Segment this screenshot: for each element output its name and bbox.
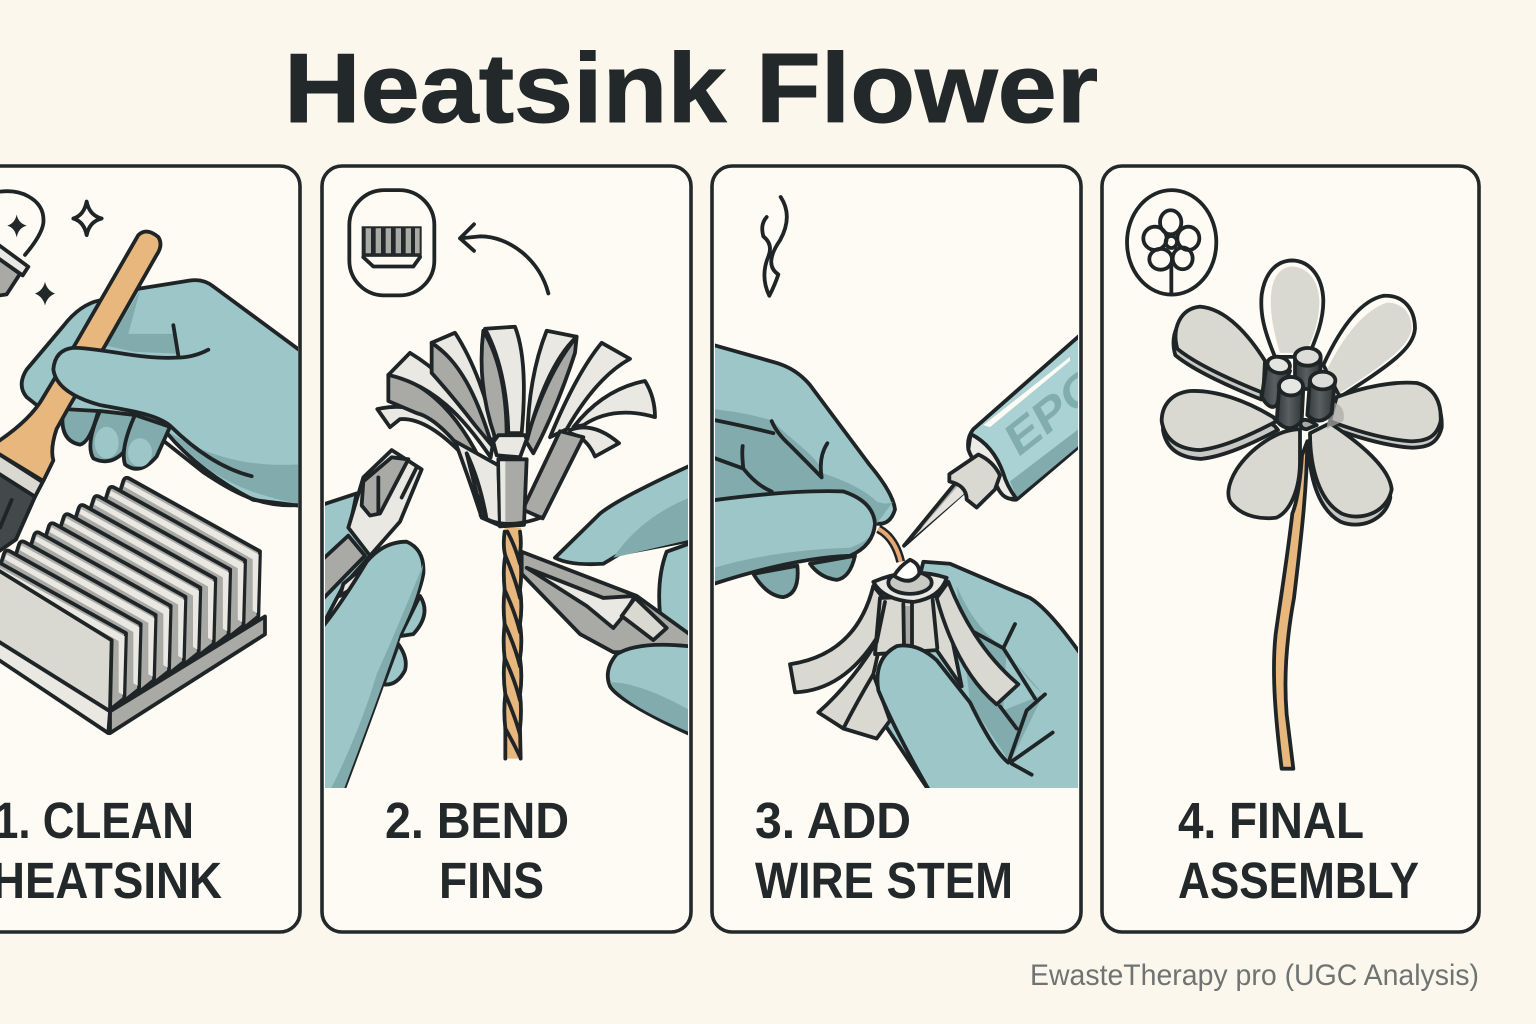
label: 3. add wire stem: 3. ADD <box>755 792 911 849</box>
front glove finger <box>877 645 1010 795</box>
fingers <box>62 409 170 469</box>
bent fins and top disc <box>790 560 1018 739</box>
right glove behind fins <box>883 562 1085 795</box>
left glove and pliers <box>320 450 425 791</box>
epoxy label text: EPO <box>998 356 1108 467</box>
label: 4. final assembly: ASSEMBLY <box>1178 852 1419 909</box>
heatsink <box>0 478 265 733</box>
label: 3. add wire stem: WIRE STEM <box>755 852 1013 909</box>
icon: sparkle large <box>73 202 102 235</box>
right glove and pliers <box>522 463 695 737</box>
bent fin fan <box>377 327 655 526</box>
arrow: bend direction <box>460 224 548 293</box>
icon: sparkle small <box>35 282 55 305</box>
title: Heatsink Flower <box>284 33 1098 143</box>
flower centre cylinders <box>1262 348 1344 429</box>
illustration: hand brushing heatsink <box>0 191 300 733</box>
flower petals <box>1162 260 1442 525</box>
panel: step 4 final assembly <box>1102 166 1479 932</box>
icon: partial cleaning badge <box>0 191 43 296</box>
twisted wire stem <box>504 528 521 759</box>
paint brush <box>0 232 160 555</box>
label: 2. bend fins: 2. BEND <box>385 792 569 849</box>
label: 1. clean heatsink <box>0 792 222 909</box>
epoxy tube <box>902 334 1078 548</box>
wire stem <box>1274 441 1307 769</box>
left glove <box>710 344 895 597</box>
label: 2. bend fins: FINS <box>439 852 544 909</box>
label: 1. clean heatsink: 1. CLEAN <box>0 792 194 849</box>
panel: step 2 bend fins <box>320 166 695 932</box>
panel: step 3 add wire stem <box>710 166 1108 932</box>
copper wire <box>878 529 901 562</box>
label: 2. bend fins <box>385 792 569 909</box>
illustration: bending fins with pliers <box>320 190 695 791</box>
icon: flower badge <box>1127 190 1216 295</box>
label: 4. final assembly <box>1178 792 1419 909</box>
glove hand back <box>22 280 300 506</box>
icon: twisted wire <box>762 197 787 296</box>
footer credit: EwasteTherapy pro (UGC Analysis) <box>1030 959 1479 992</box>
label: 3. add wire stem <box>755 792 1013 909</box>
illustration: gluing wire stem <box>710 197 1108 795</box>
illustration: finished flower <box>1127 190 1442 769</box>
glove thumb <box>53 325 252 476</box>
panel: step 1 clean heatsink <box>0 166 300 932</box>
icon: heatsink badge <box>349 190 434 295</box>
label: 4. final assembly: 4. FINAL <box>1178 792 1364 849</box>
